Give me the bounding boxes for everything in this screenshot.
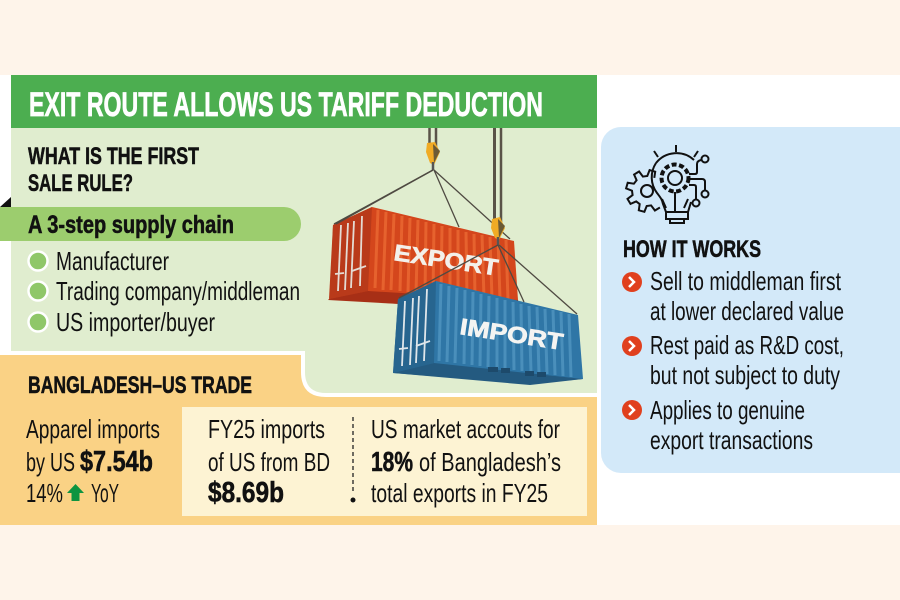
stat: apparel imports xyxy=(26,414,160,508)
list: supply chain steps: US importer/buyer xyxy=(56,307,215,337)
slings: export xyxy=(334,170,510,239)
bullet: applies to genuine xyxy=(622,395,813,455)
stat: apparel imports: $7.54b xyxy=(80,446,153,478)
container: export xyxy=(328,207,519,306)
bullet: sell to middleman: Sell to middleman first xyxy=(650,266,842,296)
icon: lightbulb and gears xyxy=(626,145,708,223)
box: FY25 and market share: 18% xyxy=(371,446,413,477)
box: FY25 and market share: total exports in FY25 xyxy=(371,478,548,508)
box: FY25 and market share: US market accouts for xyxy=(371,414,560,444)
list: supply chain steps: Trading company/middleman xyxy=(56,276,300,306)
slings: import xyxy=(399,245,577,314)
heading: Bangladesh-US trade: BANGLADESH–US TRADE xyxy=(28,372,252,399)
bullet: rest paid as R&D xyxy=(622,330,844,390)
container: import xyxy=(393,281,583,385)
list: supply chain steps xyxy=(28,246,300,337)
crane cable: import xyxy=(491,128,505,245)
ribbon fold xyxy=(0,197,11,207)
pill: 3-step supply chain: A 3-step supply chain xyxy=(28,211,234,239)
stat: apparel imports: by US xyxy=(26,447,75,477)
panel: Bangladesh-US trade xyxy=(0,351,597,525)
bullet: rest paid as R&D: but not subject to duty xyxy=(650,360,840,390)
heading: what is the first sale rule: WHAT IS THE FIRST xyxy=(28,143,199,170)
stat: apparel imports: 14% xyxy=(26,478,63,508)
box: FY25 and market share: FY25 imports xyxy=(208,414,325,444)
bullet: sell to middleman xyxy=(622,266,844,326)
box: FY25 and market share xyxy=(182,407,587,516)
stat: apparel imports: Apparel imports xyxy=(26,414,160,444)
header: title banner xyxy=(11,75,597,128)
stat: apparel imports: YoY xyxy=(91,478,119,508)
box: FY25 and market share: of US from BD xyxy=(208,447,330,477)
container: export: EXPORT xyxy=(392,239,500,280)
illustration: hanging containers xyxy=(328,128,583,385)
list: supply chain steps: Manufacturer xyxy=(56,246,169,276)
bullet: applies to genuine: Applies to genuine xyxy=(650,395,805,425)
box: FY25 and market share: of Bangladesh’s xyxy=(419,447,561,477)
header: title banner: EXIT ROUTE ALLOWS US TARIFF DEDUCTION xyxy=(29,86,543,124)
container: import: IMPORT xyxy=(458,313,565,355)
heading: how it works: HOW IT WORKS xyxy=(623,236,761,263)
panel: how it works xyxy=(601,127,900,473)
heading: what is the first sale rule xyxy=(28,143,199,197)
heading: what is the first sale rule: SALE RULE? xyxy=(28,170,133,197)
bullet: applies to genuine: export transactions xyxy=(650,425,813,455)
box: FY25 and market share: $8.69b xyxy=(208,477,284,509)
panel: first sale rule xyxy=(0,128,597,395)
crane cable: export xyxy=(426,128,440,170)
